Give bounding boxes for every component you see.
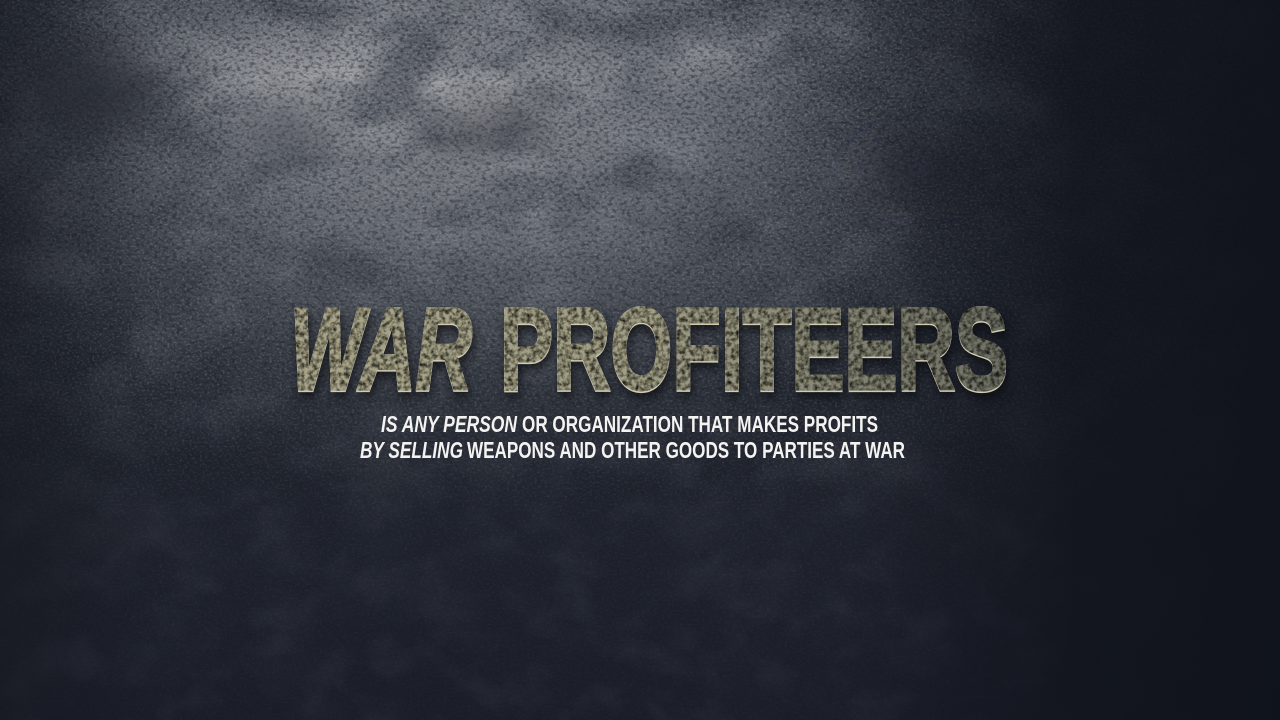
subtitle line 1 — [381, 411, 878, 437]
subtitle line 1: OR ORGANIZATION THAT MAKES PROFITS — [522, 411, 878, 437]
subtitle line 2: BY SELLING — [360, 437, 463, 463]
subtitle line 1: IS ANY PERSON — [381, 411, 518, 437]
subtitle line 2 — [360, 437, 905, 463]
title: WAR PROFITEERS: WAR — [290, 284, 472, 414]
subtitle line 2: WEAPONS AND OTHER GOODS TO PARTIES AT WAR — [467, 437, 905, 463]
subtitle: definition text — [360, 411, 905, 463]
title: WAR PROFITEERS — [290, 284, 1008, 414]
title: WAR PROFITEERS: PROFITEERS — [500, 284, 1008, 414]
